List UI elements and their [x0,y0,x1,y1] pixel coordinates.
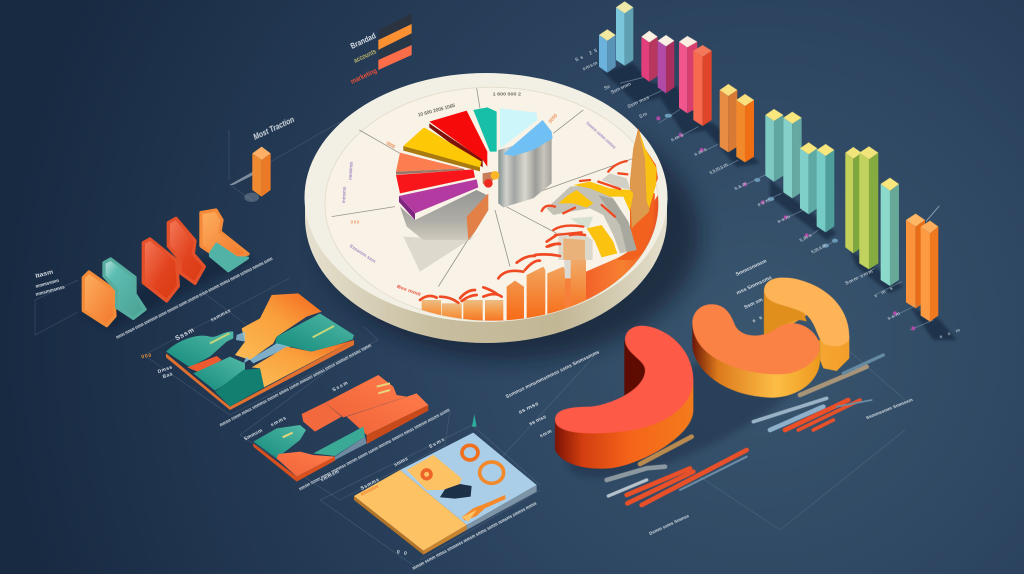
bar labels: sms [873,285,894,299]
panel: terrain two [253,375,428,482]
legend swatches [378,13,412,70]
frame guide lines [35,122,905,570]
bar labels: sms [670,132,685,143]
left chart labels: mmmssmm [35,278,60,290]
bar labels: Sm [638,111,649,120]
horseshoe labels: mss Smmssms [736,275,773,296]
red data strips [607,355,883,505]
bar connectors and icons [620,77,933,330]
horseshoe labels [505,258,914,537]
panel captions: smmsm [320,469,340,483]
bar labels [574,48,962,340]
bar labels: smsm [582,60,599,72]
plate labels: mmsms [341,186,347,203]
panel captions: smms [270,415,287,428]
right 3D bar chart [574,1,962,340]
horseshoe labels: Smmssmmsm [735,258,768,278]
left chart labels [35,256,274,341]
horseshoe ground shadow [552,317,828,503]
panel captions: mmsm ssmm mmss smmmss mmsm smms ssmm mmsms smmss mmss smmsm mssms ssmm [219,343,373,428]
bar labels: ssmsm [708,162,729,176]
bar labels: ssm [757,197,772,208]
panel captions: Smmsm [243,427,264,442]
pillar title: Most Traction [252,114,296,142]
panel captions: 00 [396,549,407,557]
wedge: red [429,111,487,167]
legend [349,13,412,86]
plate labels: 1 600 000 2 [493,92,522,97]
bar labels: Ss [574,54,585,63]
bar labels: Ssm smm [610,81,633,96]
panel captions: 000 [141,353,152,360]
plate rim [304,73,668,322]
wedge: teal [473,107,497,152]
bar group: blue [599,1,633,73]
bar labels: Ss [603,84,611,92]
horseshoe labels: Dsmm ssms Smmss [648,513,690,537]
legend labels [349,31,378,86]
horseshoe labels: ss mss [528,414,548,427]
wedge: blue [503,120,553,156]
bar group: green [845,146,878,269]
bar group: pink and magenta [641,31,674,93]
left 3D bar shapes [35,210,274,341]
bar group: teal two [800,142,834,232]
bar: aqua [881,178,899,286]
panel: map three [354,414,537,555]
isometric terrain panels [141,293,538,572]
panel captions: Dmss [157,364,173,375]
panel captions: ssmmss [210,308,232,323]
plate labels: Esssmm ssm [349,243,377,264]
panel captions: Ssms [428,437,446,450]
bar labels: ssm [939,327,962,340]
horseshoe labels: ss mss [518,401,540,416]
orange horseshoe [692,304,820,398]
bars along rim [422,192,660,327]
bar shadows [603,63,957,340]
teal block [104,259,145,318]
orange block [83,272,115,326]
bar group: teal [765,109,802,198]
panel captions: Sssm [174,327,195,342]
central pie plate [304,73,668,343]
plate labels: 10 600 2005 1065 [417,103,456,119]
plate labels [341,92,617,297]
horseshoe labels: smm [539,428,553,439]
horseshoe labels: Ssmmss mmsmmsmmss ssms Smmssmms [505,349,601,400]
rim bar red curls [420,234,585,303]
horseshoe labels: ss [752,315,763,324]
left chart labels: mmss mmsm ssmm smmsmm ssmm mmsms ssmm smsmm mssm smsmm smmss mmsm ssmmss mmsms ssmm [115,256,274,341]
pie cylinder [498,135,552,207]
legend labels: marketing [350,68,378,86]
panel: map three: mmssmm [360,483,380,498]
plate labels: 0050 [548,113,559,125]
legend labels: Brandad [349,31,377,51]
left chart labels: Itasm [35,269,54,280]
wedge: purple [399,179,478,220]
bar labels: sms [693,147,708,158]
panel captions: smms [393,456,409,468]
bar labels: ssm [777,214,792,225]
bar labels: sms [798,232,813,243]
ribbon red curls [542,161,627,247]
orange and teal block [201,210,248,257]
bar labels: ssm [733,180,748,192]
teal marker [472,414,477,427]
bar group: tall orange [906,206,939,322]
plate labels: 0005 [385,141,396,151]
bar group: orange [720,84,754,162]
wedge: pale cyan [500,108,537,148]
plate labels: Sssmm ssmm smmss [585,120,617,150]
wedge: yellow [403,127,482,171]
bar group: pink and coral [679,36,712,126]
plate labels: mmsmss [348,161,354,180]
panel captions: mmsm ssmm mmss smmmss mmsm smms ssmm mmsms smmss mmss [411,501,538,572]
pie hub [483,171,499,188]
left chart labels: mmsmmsmss [35,284,66,298]
tangled ribbon shapes [542,128,658,260]
panel: terrain one [166,293,354,410]
rings [422,445,504,483]
radial divider lines [332,88,633,287]
panel captions: Sssm [331,380,349,393]
horseshoe labels: Ssmmssmm Smmssm [865,397,914,421]
wedge: coral [396,153,463,172]
red block [143,239,178,301]
bar labels: 25 [588,48,599,57]
plate shadow [320,110,700,360]
red horseshoe [555,326,693,469]
panel captions: mmsm ssmm mmss smmmss mmsm smms ssmm mmsms smmss mmss smmsm mssms ssmm [298,407,451,492]
plate inner [325,87,658,321]
plate labels: 000 [351,219,360,224]
red block 2 [168,218,204,283]
yellow horseshoe [764,277,849,371]
pie lower grey body [400,190,488,240]
panel captions [141,308,538,572]
pie shadow [403,227,490,272]
horseshoe labels: Ssm sm [743,297,764,311]
horseshoe chart [505,258,914,537]
wedge: bright red [396,169,475,193]
bar labels: ssm [887,310,902,322]
bar labels: Ssm mss [627,95,651,110]
plate side [305,197,667,343]
panel captions: Ssmms [360,477,380,492]
bar labels: Smm smm [844,268,875,287]
plate labels: Bss mm0 [396,284,422,297]
legend labels: accounts [353,48,378,65]
bar labels: smsm [810,242,828,255]
panel captions: Bas [162,371,174,380]
single orange pillar with title [229,114,296,202]
